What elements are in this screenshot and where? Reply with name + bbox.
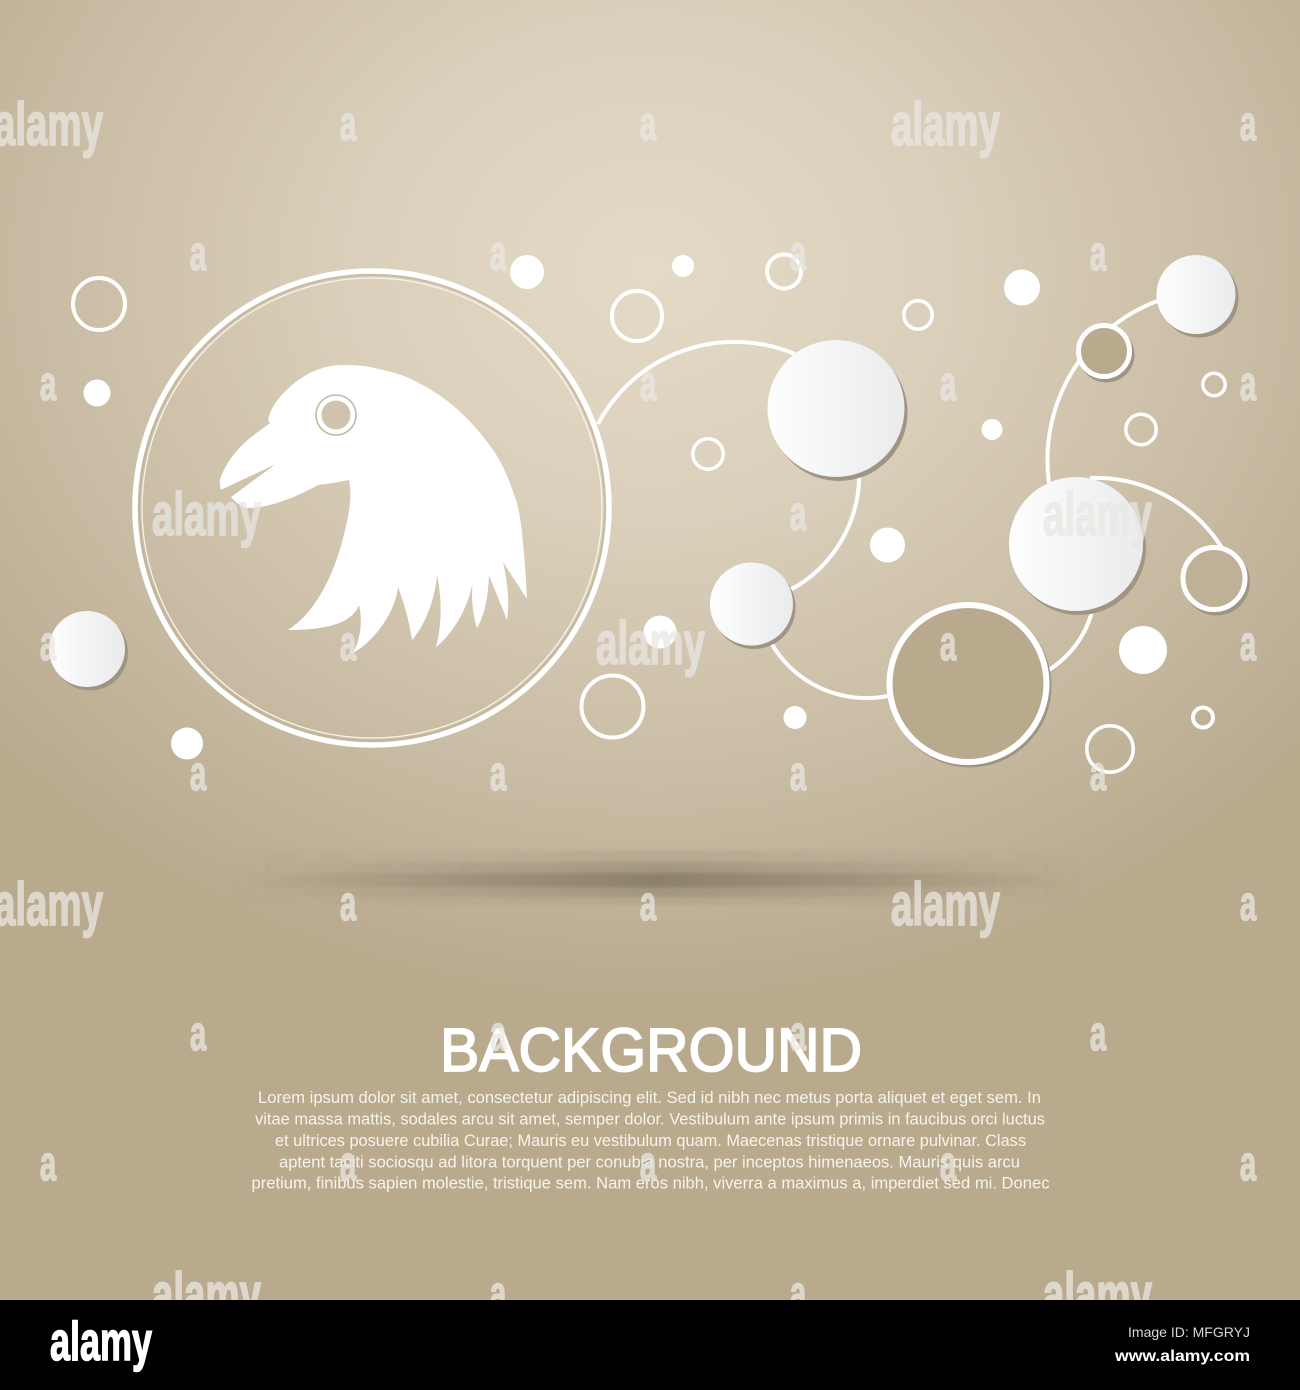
watermark pattern: a	[790, 1005, 807, 1061]
watermark pattern: alamy	[152, 1261, 261, 1328]
ring: upper right filled	[1078, 326, 1134, 382]
disc: top right	[1156, 255, 1238, 338]
watermark pattern: a	[490, 225, 507, 281]
body text: et ultrices posuere cubilia Curae; Mauris eu vestibulum quam. Maecenas tristique ornare pulvinar. Class	[275, 1132, 1026, 1150]
body text: aptent taciti sociosqu ad litora torquent per conubia nostra, per inceptos himenaeos. Mauris quis arcu	[279, 1153, 1020, 1171]
watermark pattern: alamy	[596, 610, 705, 677]
watermark pattern: a	[1240, 355, 1257, 411]
body text: vitae massa mattis, sodales arcu sit amet, semper dolor. Vestibulum ante ipsum primis in faucibus orci luctus	[255, 1110, 1045, 1128]
body text: pretium, finibus sapien molestie, tristique sem. Nam eros nibh, viverra a maximus a, imperdiet sed mi. Donec	[252, 1175, 1050, 1193]
watermark pattern: a	[40, 1135, 57, 1191]
watermark pattern: a	[340, 615, 357, 671]
watermark pattern: a	[490, 1265, 507, 1321]
watermark pattern: a	[1090, 1005, 1107, 1061]
floor shadow	[230, 850, 1085, 905]
footer logo: alamy	[50, 1310, 152, 1372]
watermark pattern: a	[490, 1005, 507, 1061]
watermark pattern: a	[1240, 1135, 1257, 1191]
watermark pattern: a	[40, 615, 57, 671]
watermark pattern: a	[790, 485, 807, 541]
watermark pattern: a	[940, 355, 957, 411]
watermark pattern: a	[640, 1135, 657, 1191]
watermark pattern: a	[340, 875, 357, 931]
decorative open rings	[73, 254, 1225, 772]
watermark pattern: a	[1240, 95, 1257, 151]
watermark pattern: a	[640, 355, 657, 411]
watermark pattern: a	[1090, 225, 1107, 281]
disc: far left	[49, 611, 128, 690]
footer bar	[0, 1300, 1300, 1390]
watermark pattern: a	[190, 225, 207, 281]
body text	[252, 1089, 1050, 1193]
icon: eagle head	[220, 365, 527, 653]
watermark pattern: a	[340, 1135, 357, 1191]
disc: right large	[1009, 477, 1146, 615]
watermark pattern: alamy	[1043, 1261, 1152, 1328]
watermark pattern: a	[790, 225, 807, 281]
watermark pattern: alamy	[891, 871, 1000, 938]
watermark pattern: a	[1240, 615, 1257, 671]
disc: small centre	[710, 562, 796, 649]
heading: BACKGROUND	[440, 1016, 862, 1084]
ring: right filled	[1183, 548, 1250, 616]
watermark pattern: a	[940, 615, 957, 671]
watermark pattern: a	[940, 1135, 957, 1191]
website: www.alamy.com	[1114, 1348, 1250, 1365]
watermark pattern: a	[640, 95, 657, 151]
connector lines	[598, 300, 1222, 698]
body text: Lorem ipsum dolor sit amet, consectetur adipiscing elit. Sed id nibh nec metus porta aliquet et eget sem. In	[258, 1089, 1041, 1107]
disc: upper centre	[768, 340, 908, 481]
watermark pattern: a	[490, 745, 507, 801]
watermark pattern: a	[340, 95, 357, 151]
watermark pattern: a	[1090, 745, 1107, 801]
watermark pattern: a	[40, 355, 57, 411]
watermark pattern: a	[1240, 875, 1257, 931]
ring: large filled	[888, 604, 1052, 768]
watermark pattern: a	[790, 1265, 807, 1321]
watermark pattern: alamy	[891, 91, 1000, 158]
image id: Image ID: MFGRYJ	[1128, 1324, 1250, 1340]
decorative solid dots	[84, 255, 1167, 760]
watermark pattern: a	[190, 745, 207, 801]
watermark pattern: a	[640, 875, 657, 931]
watermark pattern: a	[790, 745, 807, 801]
watermark pattern: a	[190, 1005, 207, 1061]
main icon badge	[135, 271, 609, 745]
eagle eye	[316, 395, 356, 435]
watermark pattern: alamy	[1043, 481, 1152, 548]
watermark pattern: alamy	[152, 481, 261, 548]
